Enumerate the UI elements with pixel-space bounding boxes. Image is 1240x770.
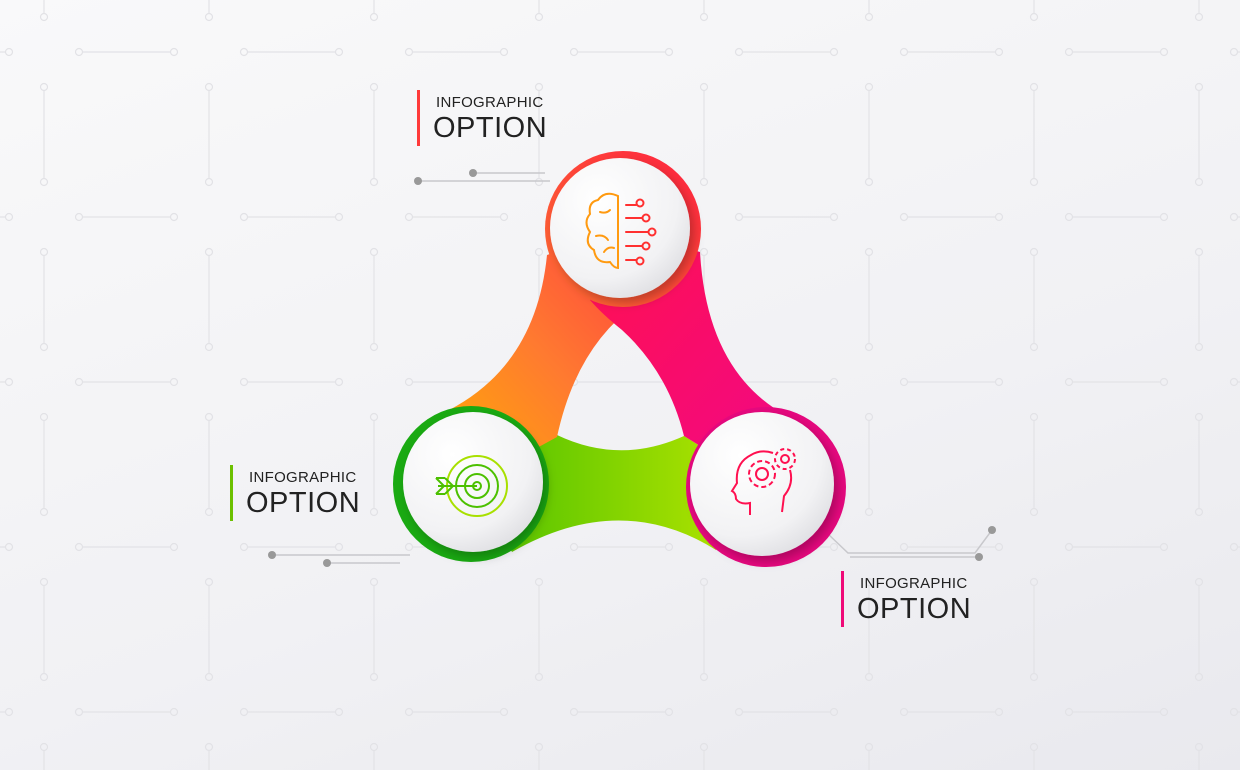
icon: target with arrow — [436, 456, 507, 516]
label: left option: OPTION — [246, 487, 360, 519]
label: top option: OPTION — [433, 112, 547, 144]
circle: top (brain) — [545, 151, 701, 307]
band: green bottom — [471, 435, 766, 552]
circle: left (target) — [393, 406, 549, 562]
label: left option: INFOGRAPHIC — [249, 469, 356, 486]
label: right option: OPTION — [857, 593, 971, 625]
band: pink right — [590, 229, 815, 487]
label: top option — [417, 90, 547, 146]
icon: head with gears — [732, 449, 795, 515]
label: right option — [841, 571, 971, 627]
icon: brain circuit — [586, 194, 656, 268]
label: top option: INFOGRAPHIC — [436, 94, 543, 111]
label: left option — [230, 465, 360, 521]
label: right option: INFOGRAPHIC — [860, 575, 967, 592]
connector dots — [268, 169, 996, 567]
band: orange left — [432, 229, 660, 484]
circle: right (head gears) — [686, 407, 846, 567]
